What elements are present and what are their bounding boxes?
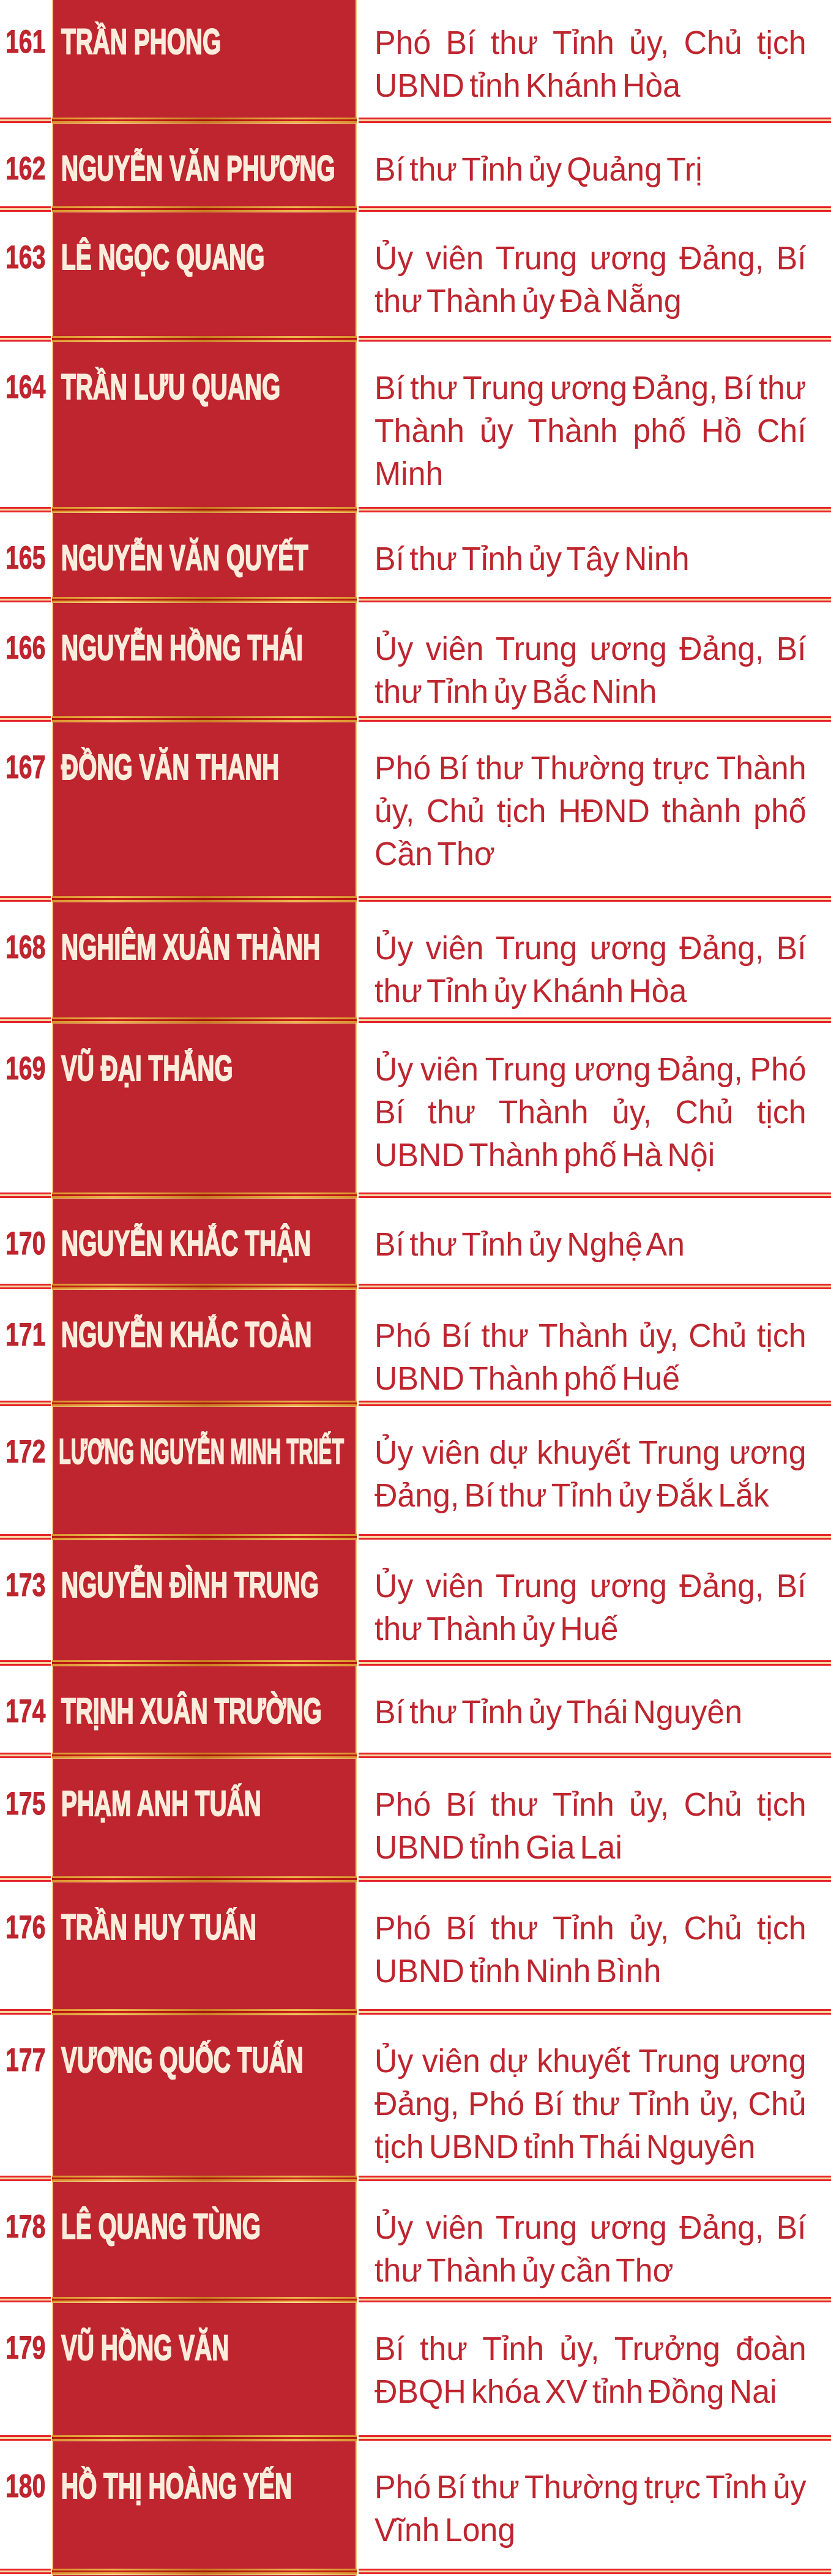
- description 174: Bí thư Tỉnh ủy Thái Nguyên: [375, 1694, 742, 1731]
- name: Trần Lưu Quang: TRẦN LƯU QUANG: [61, 367, 280, 407]
- description 165: Bí thư Tỉnh ủy Tây Ninh: [375, 541, 690, 577]
- number 166: 166: [6, 630, 45, 666]
- row 180: [6, 2466, 807, 2548]
- number 176: 176: [6, 1909, 45, 1945]
- description 164: Thành ủy Thành phố Hồ Chí: [375, 413, 807, 449]
- row 164: [6, 367, 807, 492]
- description 167: [375, 750, 807, 872]
- description 161: UBND tỉnh Khánh Hòa: [375, 67, 680, 104]
- name: Hồ Thị Hoàng Yến: HỒ THỊ HOÀNG YẾN: [61, 2466, 292, 2506]
- name: Trần Huy Tuấn: TRẦN HUY TUẤN: [61, 1908, 256, 1947]
- name: Vũ Đại Thắng: VŨ ĐẠI THẮNG: [61, 1049, 233, 1088]
- description 167: ủy, Chủ tịch HĐND thành phố: [375, 793, 807, 829]
- description 164: [375, 370, 807, 492]
- name: Đồng Văn Thanh: ĐỒNG VĂN THANH: [61, 747, 279, 787]
- row 177: [6, 2040, 807, 2165]
- name: Vương Quốc Tuấn: VƯƠNG QUỐC TUẤN: [61, 2040, 304, 2080]
- number 171: 171: [6, 1317, 45, 1353]
- number 178: 178: [6, 2209, 45, 2245]
- description 170: Bí thư Tỉnh ủy Nghệ An: [375, 1226, 685, 1263]
- row 176: [6, 1907, 807, 1990]
- description 166: Ủy viên Trung ương Đảng, Bí: [375, 631, 807, 667]
- description 175: UBND tỉnh Gia Lai: [375, 1829, 622, 1866]
- description 163: thư Thành ủy Đà Nẵng: [375, 283, 682, 320]
- row 174: [6, 1691, 742, 1731]
- description 168: Ủy viên Trung ương Đảng, Bí: [375, 930, 807, 967]
- description 176: UBND tỉnh Ninh Bình: [375, 1953, 661, 1990]
- name: Lương Nguyễn Minh Triết: LƯƠNG NGUYỄN MINH TRIẾT: [59, 1432, 344, 1472]
- name: Lê Ngọc Quang: LÊ NGỌC QUANG: [61, 238, 264, 277]
- row 175: [6, 1783, 807, 1866]
- description 171: UBND Thành phố Huế: [375, 1360, 680, 1397]
- description 178: thư Thành ủy cần Thơ: [375, 2252, 674, 2289]
- description 169: Ủy viên Trung ương Đảng, Phó: [375, 1051, 807, 1088]
- description 177: [375, 2043, 807, 2165]
- row 173: [6, 1565, 807, 1647]
- description 180: Vĩnh Long: [375, 2512, 515, 2548]
- row 166: [6, 627, 807, 710]
- description 172: Đảng, Bí thư Tỉnh ủy Đắk Lắk: [375, 1477, 769, 1514]
- row 169: [6, 1048, 807, 1174]
- description 179: Bí thư Tỉnh ủy, Trưởng đoàn: [375, 2331, 807, 2367]
- row 179: [6, 2327, 807, 2410]
- description 180: Phó Bí thư Thường trực Tỉnh ủy: [375, 2469, 807, 2506]
- description 163: [375, 240, 807, 320]
- description 166: [375, 631, 807, 710]
- description 161: [375, 24, 807, 104]
- description 161: Phó Bí thư Tỉnh ủy, Chủ tịch: [375, 24, 807, 61]
- number 174: 174: [6, 1693, 45, 1729]
- description 178: [375, 2209, 807, 2289]
- row 161: [6, 21, 807, 104]
- description 179: [375, 2331, 807, 2410]
- description 167: Phó Bí thư Thường trực Thành: [375, 750, 807, 787]
- description 176: Phó Bí thư Tỉnh ủy, Chủ tịch: [375, 1910, 807, 1947]
- description 169: Bí thư Thành ủy, Chủ tịch: [375, 1094, 807, 1131]
- number 175: 175: [6, 1786, 45, 1822]
- name: Vũ Hồng Văn: VŨ HỒNG VĂN: [61, 2328, 229, 2368]
- description 171: Phó Bí thư Thành ủy, Chủ tịch: [375, 1317, 807, 1354]
- description 172: [375, 1434, 807, 1514]
- description 175: [375, 1786, 807, 1866]
- name: Phạm Anh Tuấn: PHẠM ANH TUẤN: [61, 1784, 261, 1824]
- name: Nguyễn Khắc Toàn: NGUYỄN KHẮC TOÀN: [61, 1315, 311, 1355]
- description 172: Ủy viên dự khuyết Trung ương: [375, 1434, 807, 1471]
- number 180: 180: [6, 2468, 45, 2504]
- row 178: [6, 2206, 807, 2289]
- number 177: 177: [6, 2042, 45, 2078]
- name: Lê Quang Tùng: LÊ QUANG TÙNG: [61, 2207, 261, 2247]
- number 168: 168: [6, 929, 45, 965]
- name: Nguyễn Khắc Thận: NGUYỄN KHẮC THẬN: [61, 1224, 311, 1264]
- description 162: Bí thư Tỉnh ủy Quảng Trị: [375, 151, 702, 188]
- description 177: Ủy viên dự khuyết Trung ương: [375, 2043, 807, 2080]
- description 166: thư Tỉnh ủy Bắc Ninh: [375, 673, 657, 710]
- name: Trần Phong: TRẦN PHONG: [61, 22, 221, 62]
- description 173: thư Thành ủy Huế: [375, 1611, 618, 1647]
- number 179: 179: [6, 2330, 45, 2366]
- description 179: ĐBQH khóa XV tỉnh Đồng Nai: [375, 2373, 777, 2410]
- name: Nguyễn Hồng Thái: NGUYỄN HỒNG THÁI: [61, 628, 303, 668]
- number 164: 164: [6, 369, 45, 405]
- description 164: Bí thư Trung ương Đảng, Bí thư: [375, 370, 807, 406]
- name: Nghiêm Xuân Thành: NGHIÊM XUÂN THÀNH: [61, 927, 320, 967]
- number 172: 172: [6, 1434, 45, 1470]
- number 163: 163: [6, 239, 45, 275]
- number 161: 161: [6, 24, 45, 60]
- number 173: 173: [6, 1567, 45, 1603]
- description 173: Ủy viên Trung ương Đảng, Bí: [375, 1568, 807, 1604]
- name: Nguyễn Văn Quyết: NGUYỄN VĂN QUYẾT: [61, 538, 308, 578]
- row 170: [6, 1223, 685, 1264]
- row 172: [6, 1431, 807, 1514]
- number 169: 169: [6, 1050, 45, 1087]
- row 168: [6, 927, 807, 1009]
- name: Trịnh Xuân Trường: TRỊNH XUÂN TRƯỜNG: [61, 1691, 322, 1731]
- row 163: [6, 237, 807, 320]
- description 180: [375, 2469, 807, 2548]
- name column background: [52, 0, 357, 2576]
- description 171: [375, 1317, 807, 1397]
- description 176: [375, 1910, 807, 1990]
- description 167: Cần Thơ: [375, 836, 495, 872]
- description 169: UBND Thành phố Hà Nội: [375, 1137, 715, 1174]
- description 169: [375, 1051, 807, 1174]
- row 165: [6, 537, 690, 578]
- number 167: 167: [6, 749, 45, 785]
- row 162: [6, 148, 702, 189]
- description 177: Đảng, Phó Bí thư Tỉnh ủy, Chủ: [375, 2086, 807, 2122]
- name: Nguyễn Đình Trung: NGUYỄN ĐÌNH TRUNG: [61, 1565, 319, 1605]
- row 171: [6, 1314, 807, 1397]
- description 164: Minh: [375, 455, 443, 492]
- number 165: 165: [6, 540, 45, 576]
- description 173: [375, 1568, 807, 1647]
- description 163: Ủy viên Trung ương Đảng, Bí: [375, 240, 807, 277]
- number 162: 162: [6, 151, 45, 187]
- row 167: [6, 747, 807, 872]
- description 177: tịch UBND tỉnh Thái Nguyên: [375, 2129, 755, 2165]
- name: Nguyễn Văn Phương: NGUYỄN VĂN PHƯƠNG: [61, 149, 335, 189]
- description 168: [375, 930, 807, 1009]
- description 175: Phó Bí thư Tỉnh ủy, Chủ tịch: [375, 1786, 807, 1823]
- number 170: 170: [6, 1226, 45, 1262]
- description 178: Ủy viên Trung ương Đảng, Bí: [375, 2209, 807, 2246]
- description 168: thư Tỉnh ủy Khánh Hòa: [375, 973, 687, 1009]
